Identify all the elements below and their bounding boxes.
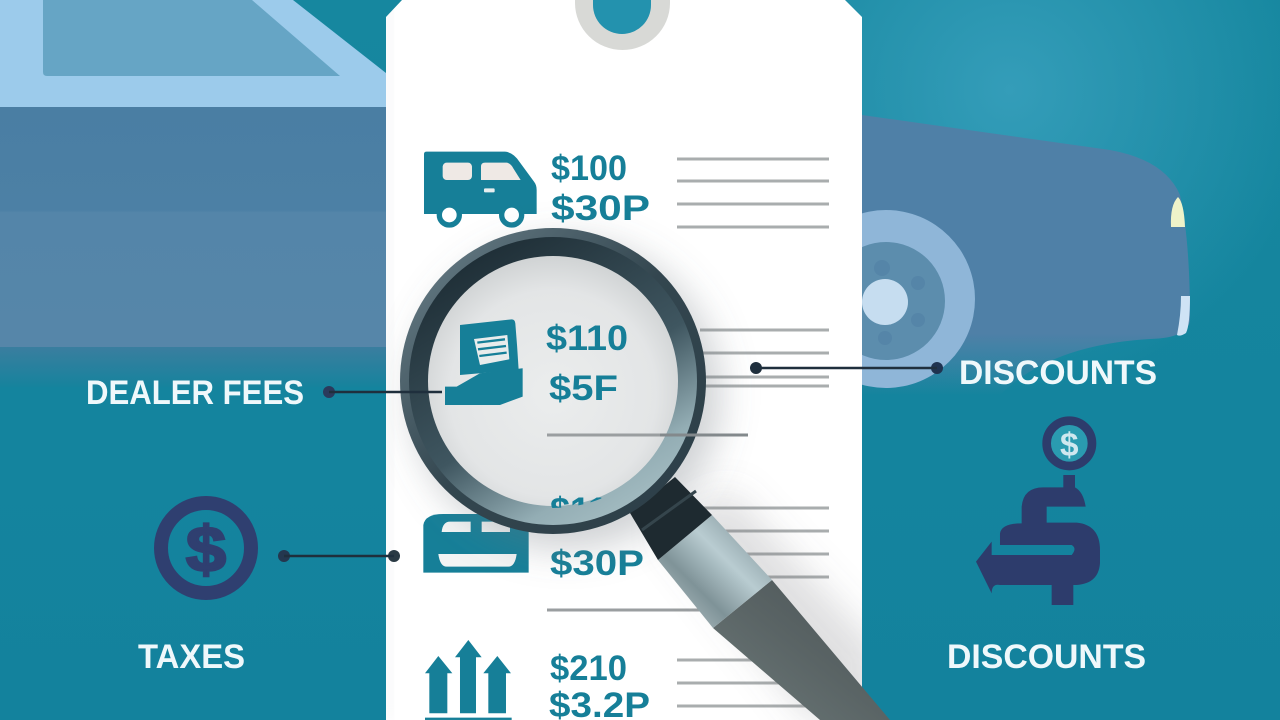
car window glass (43, 0, 340, 76)
price: $110: $110 (546, 319, 628, 358)
handle silver ferrule (658, 515, 772, 628)
price tag (386, 0, 862, 720)
callout: dealer fees (86, 374, 442, 412)
callout: taxes (138, 503, 400, 676)
magnified content (445, 319, 660, 508)
leader line: dealer fees (323, 386, 442, 398)
car window frame (0, 0, 386, 107)
icon: dollar pipe with arrow (976, 421, 1100, 605)
icon: dollar coin: $ (186, 513, 226, 585)
icon: dollar coin (161, 503, 251, 593)
handle (630, 477, 890, 720)
lens (428, 256, 678, 506)
headlight (1171, 197, 1185, 227)
label: discounts upper: DISCOUNTS (959, 354, 1157, 392)
label: taxes: TAXES (138, 638, 245, 676)
car illustration: left side (0, 0, 386, 387)
price: $5F: $5F (549, 369, 618, 408)
shadows on tag (386, 0, 880, 720)
icon: dollar pipe with arrow: $ (1060, 427, 1079, 464)
icon: box (423, 514, 529, 573)
wheel (797, 210, 975, 388)
tag eyelet (575, 0, 670, 50)
row 4: arrows (425, 640, 835, 720)
row 1: van (424, 149, 829, 228)
icon: document in hand (445, 319, 523, 405)
leader line: taxes (278, 550, 400, 562)
clipped price: $110 (550, 491, 628, 530)
callout: discounts upper (750, 354, 1157, 392)
price: $30P lower: $30P (550, 544, 644, 583)
lower light (1177, 296, 1190, 336)
car illustration: right side (797, 115, 1190, 395)
label: dealer fees: DEALER FEES (86, 374, 304, 412)
rim (400, 228, 706, 534)
car body right (862, 115, 1190, 395)
row 3: box (423, 508, 829, 610)
icon: three up arrows (425, 640, 512, 720)
handle collar (630, 477, 712, 560)
handle grip (713, 580, 890, 720)
price: $30P: $30P (551, 189, 650, 228)
magnifying glass (400, 228, 890, 720)
callout: discounts lower (947, 421, 1146, 676)
label: discounts lower: DISCOUNTS (947, 638, 1146, 676)
car body (0, 107, 386, 347)
icon: van (424, 152, 537, 225)
price: $100: $100 (551, 149, 627, 188)
row 2 lines (700, 330, 829, 386)
leader line: discounts (750, 362, 943, 374)
price: $210: $210 (550, 649, 627, 688)
car body fade (0, 347, 386, 387)
